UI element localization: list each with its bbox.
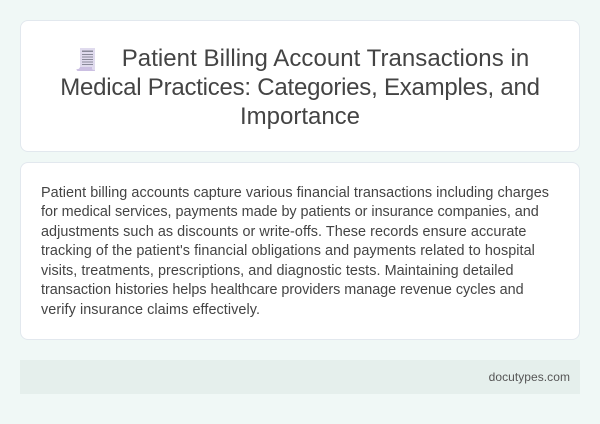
title text: Importance	[240, 103, 360, 130]
description text: adjustments such as discounts or write-offs. These records ensure accurate	[41, 224, 526, 240]
footer source text: docutypes.com	[489, 370, 570, 384]
description text: Patient billing accounts capture various financial transactions including charges	[41, 185, 549, 201]
title text	[60, 45, 540, 130]
footer bar	[20, 360, 580, 394]
description text	[41, 185, 549, 318]
description text: verify insurance claims effectively.	[41, 302, 260, 318]
description text: tracking of the patient's financial obligations and payments related to hospital	[41, 243, 535, 259]
description text: transaction histories helps healthcare providers manage revenue cycles and	[41, 282, 524, 298]
description text: visits, treatments, prescriptions, and diagnostic tests. Maintaining detailed	[41, 263, 514, 279]
description text: for medical services, payments made by patients or insurance companies, and	[41, 204, 539, 220]
title text: Medical Practices: Categories, Examples, and	[60, 74, 540, 101]
description panel	[20, 162, 580, 340]
title panel	[20, 20, 580, 152]
title text: Patient Billing Account Transactions in	[122, 45, 529, 72]
icon: receipt	[76, 48, 95, 71]
